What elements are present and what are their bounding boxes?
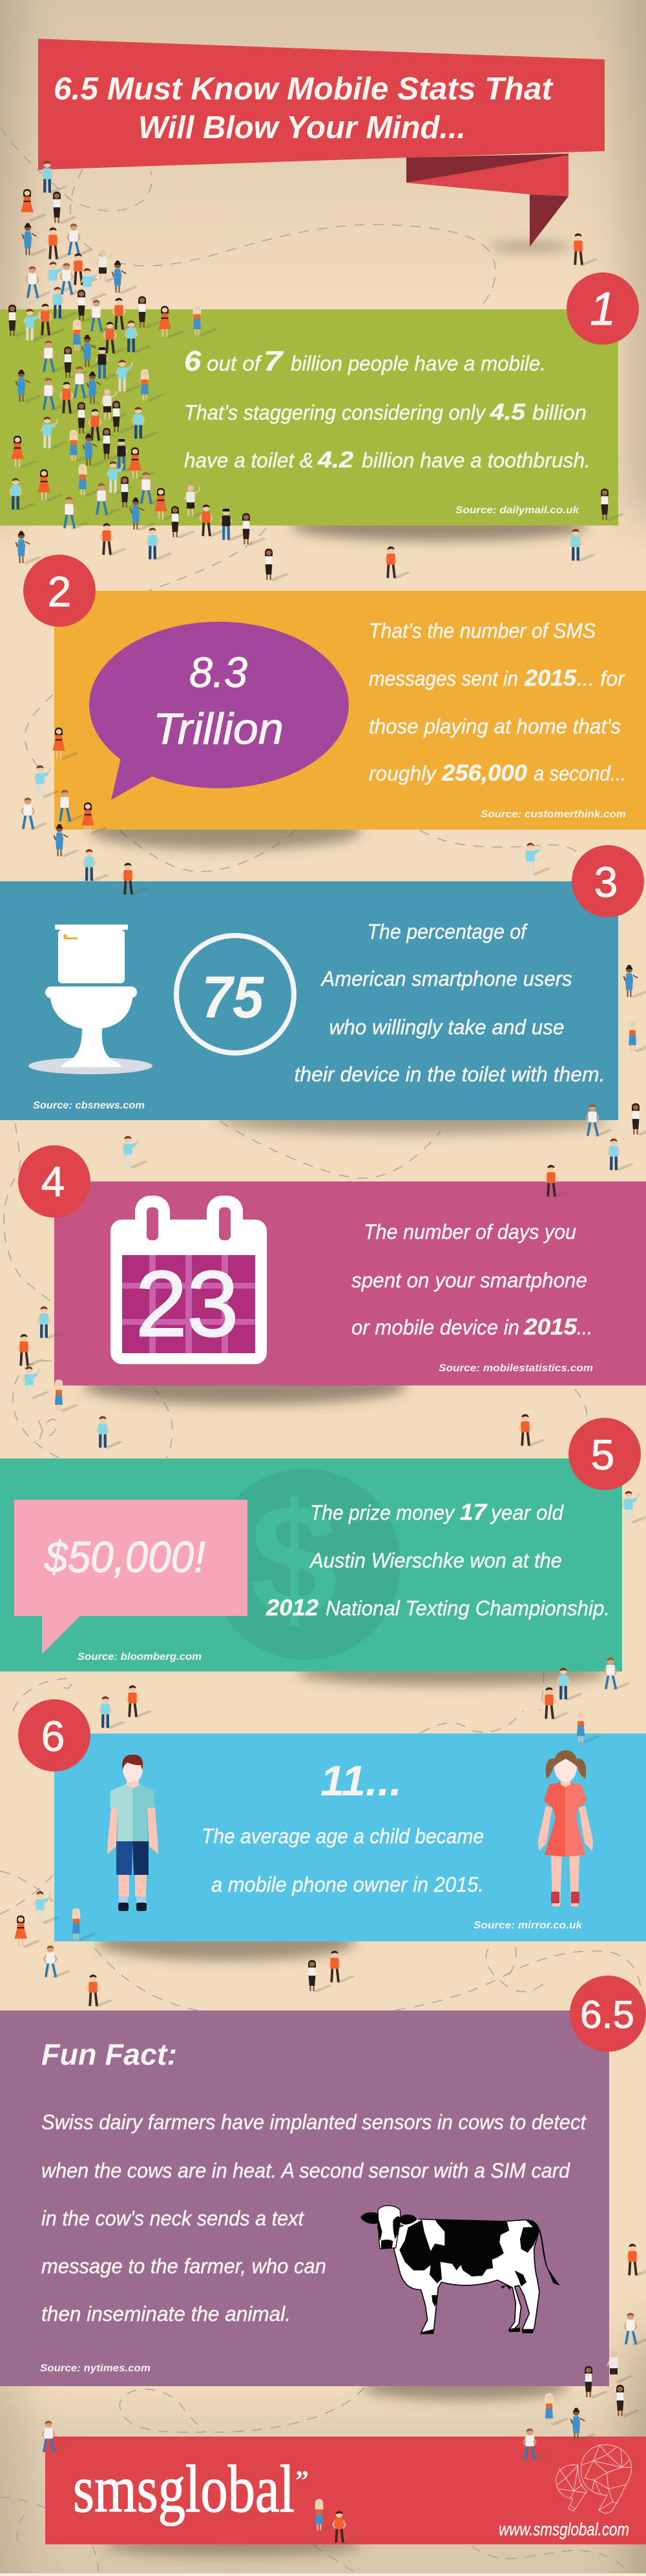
icon: toilet [28,925,152,1074]
badge 3: 3 [594,858,618,906]
stat text: ... for [577,667,625,690]
badge 6.5: 6.5 [580,1993,634,2036]
source: Source: mirror.co.uk [474,1920,583,1931]
panel 5: prize money [0,1458,622,1671]
source: Source: dailymail.co.uk [455,505,579,516]
badge 4: 4 [41,1158,65,1205]
body text: message to the farmer, who can [41,2254,326,2278]
panel shadows [84,243,607,2556]
badge 3 [572,845,644,917]
stat text: have a toilet & [184,449,313,472]
stat text: or mobile device in [351,1316,519,1339]
badge 6.5 [570,1976,646,2052]
stat text: The prize money [310,1501,455,1524]
badge 1 [567,272,639,345]
stat text: 4.5 [490,400,526,425]
panel 3: toilet users [0,881,618,1120]
body text: Swiss dairy farmers have implanted sensors in cows to detect [41,2111,587,2134]
speech box: $50,000! [44,1533,205,1582]
crowd of people: top and panel 1 [8,161,625,581]
icon: dollar coin [209,1469,401,1660]
source: Source: mobilestatistics.com [439,1363,593,1374]
badge 6 [18,1699,90,1772]
logo: smsglobal: ” [295,2466,309,2496]
badge 5: 5 [591,1431,614,1478]
body text: in the cow's neck sends a text [41,2207,304,2230]
logo: smsglobal: smsglobal [73,2452,295,2526]
heading: Fun Fact: [41,2038,177,2071]
speech box [14,1500,247,1654]
stat text: messages sent in [369,667,518,690]
speech bubble: 8.3 [189,648,247,696]
banner ribbon [38,39,605,170]
stat text: 2012 [266,1595,319,1620]
source: Source: customerthink.com [481,809,626,820]
source: Source: cbsnews.com [33,1100,145,1111]
icon: network quote mark [556,2445,631,2513]
stat text: National Texting Championship. [326,1597,610,1620]
stat text: American smartphone users [320,967,572,990]
footer [45,2437,646,2544]
stat text: a mobile phone owner in 2015. [211,1873,484,1896]
title text: Will Blow Your Mind... [138,110,466,145]
stat text: 17 [460,1500,488,1525]
stat text: roughly [369,762,437,785]
panel 1: mobile ownership [0,309,618,526]
stat text: spent on your smartphone [351,1269,587,1292]
stat text: a second... [534,762,626,785]
75 ring [176,935,294,1053]
badge 4 [18,1145,90,1218]
body text: then inseminate the animal. [41,2302,291,2326]
stat text: billion have a toothbrush. [362,449,590,472]
stat number: 11... [320,1757,402,1804]
icon: calendar 23: 23 [136,1252,238,1356]
banner tail [406,154,568,247]
speech bubble [89,622,349,800]
stat text: That’s staggering considering only [184,401,486,424]
stat text: That’s the number of SMS [369,619,596,642]
75 ring: 75 [202,965,265,1030]
people: panels 2 and 3 [21,728,646,1137]
stat text: 2015 [523,1314,578,1340]
stat text: The average age a child became [202,1825,484,1848]
title banner [38,39,605,247]
badge 2: 2 [48,567,71,615]
source: Source: bloomberg.com [78,1651,202,1662]
stat text: billion people have a mobile. [291,352,546,375]
source: Source: nytimes.com [40,2363,151,2374]
panel 2: SMS volume [54,591,646,830]
stat text: year old [490,1501,564,1524]
stat text: 6 [184,345,202,377]
stat text: who willingly take and use [329,1016,565,1039]
stat text: 2015 [524,666,577,691]
title text: 6.5 Must Know Mobile Stats That [54,72,554,107]
people: panels 4 and 5 [17,1136,646,1729]
stat text: The percentage of [368,920,528,943]
badge 2 [23,555,96,627]
badge 6: 6 [41,1712,65,1760]
stat text: those playing at home that’s [369,715,621,738]
people: panels 6 and fun fact [14,1711,646,2417]
people: footer [42,2393,596,2544]
panel 4: days on device [54,1181,646,1385]
badge 5 [568,1418,641,1490]
stat text: Austin Wierschke won at the [309,1549,562,1572]
stat text: 7 [264,345,284,377]
stat text: 4.2 [317,447,354,473]
stat text: billion [532,401,587,424]
stat text: their device in the toilet with them. [295,1063,605,1086]
icon: dollar coin: $ [250,1471,338,1648]
panel 6: child age [54,1733,646,1941]
panel 6.5: fun fact [0,2010,609,2386]
stat text: 256,000 [441,761,528,786]
badge 1: 1 [590,283,616,335]
stat text: The number of days you [364,1220,576,1243]
body text: when the cows are in heat. A second sensor with a SIM card [41,2159,570,2182]
speech bubble: Trillion [153,704,284,753]
icon: girl [538,1750,593,1906]
stat text: ... [577,1316,592,1339]
icon: calendar 23 [110,1196,267,1364]
icon: boy [107,1755,158,1911]
stat text: out of [207,352,262,375]
icon: cow [360,2205,560,2335]
